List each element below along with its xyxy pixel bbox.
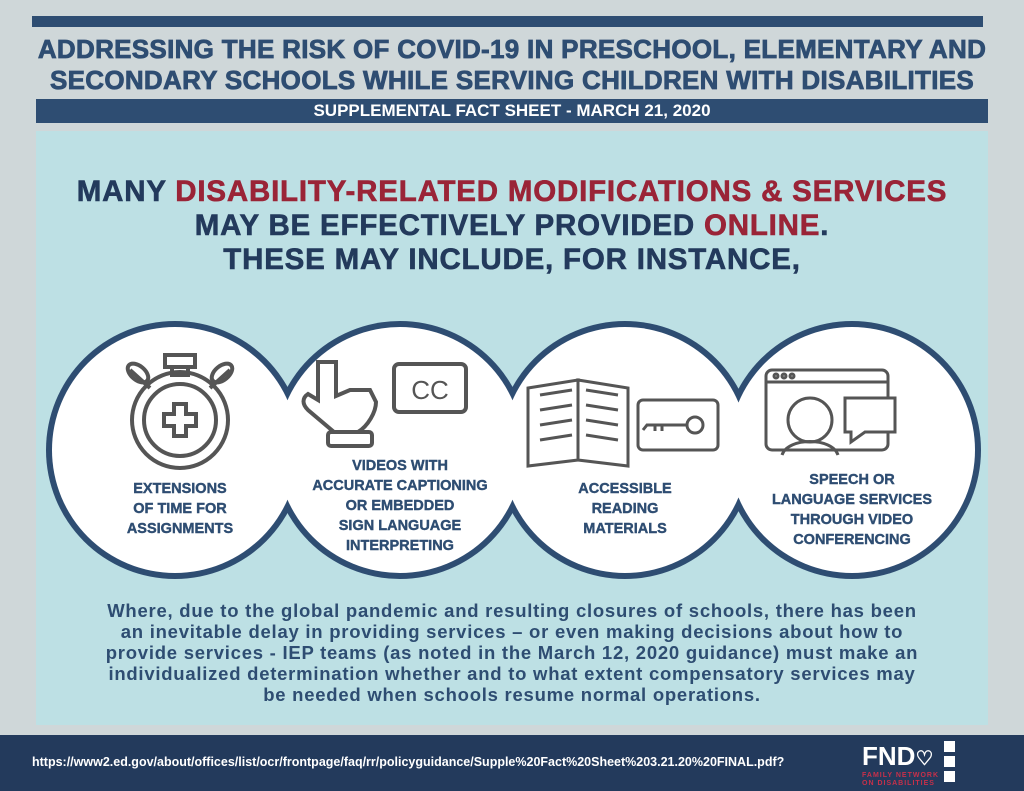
paragraph: individualized determination whether and to what extent compensatory services may <box>108 663 916 684</box>
subtitle bar: SUPPLEMENTAL FACT SHEET - MARCH 21, 2020 <box>313 101 711 120</box>
logo <box>862 741 939 787</box>
label: reading <box>578 481 672 537</box>
icon: sign hand and CC <box>304 362 466 446</box>
label: speech <box>772 472 932 548</box>
paragraph: provide services - IEP teams (as noted in the March 12, 2020 guidance) must make an <box>106 642 918 663</box>
logo: ON DISABILITIES <box>862 780 935 787</box>
label: extensions <box>127 481 233 537</box>
paragraph: an inevitable delay in providing services – or even making decisions about how to <box>121 621 903 642</box>
label: reading: READING <box>592 501 658 517</box>
label: videos: VIDEOS WITH <box>352 458 448 474</box>
label: videos: OR EMBEDDED <box>346 498 454 514</box>
logo: FAMILY NETWORK <box>862 772 939 779</box>
title: SECONDARY SCHOOLS WHILE SERVING CHILDREN WITH DISABILITIES <box>50 65 974 95</box>
paragraph <box>106 600 918 705</box>
label: videos <box>312 458 488 554</box>
footer url: https://www2.ed.gov/about/offices/list/ocr/frontpage/faq/rr/policyguidance/Supple%20Fact%20Sheet%203.21.20%20FINAL.pdf? <box>32 755 784 769</box>
top bar <box>32 16 983 27</box>
panel: main content <box>36 131 988 725</box>
paragraph: be needed when schools resume normal operations. <box>263 684 761 705</box>
icon: book and key <box>528 380 718 466</box>
label: speech: THROUGH VIDEO <box>791 512 913 528</box>
label: reading: ACCESSIBLE <box>578 481 672 497</box>
social icons <box>944 741 955 782</box>
title <box>38 34 986 95</box>
label: extensions: ASSIGNMENTS <box>127 521 233 537</box>
subtitle bar <box>36 99 988 123</box>
circles chart: CC <box>411 375 449 405</box>
label: speech: CONFERENCING <box>793 532 911 548</box>
logo: FND♡ <box>862 741 933 771</box>
title: ADDRESSING THE RISK OF COVID-19 IN PRESCHOOL, ELEMENTARY AND <box>38 34 986 64</box>
label: speech: SPEECH OR <box>809 472 895 488</box>
label: videos: INTERPRETING <box>346 538 454 554</box>
label: videos: SIGN LANGUAGE <box>339 518 461 534</box>
headline: THESE MAY INCLUDE, FOR INSTANCE, <box>223 243 801 276</box>
label: extensions: OF TIME FOR <box>133 501 227 517</box>
headline: MAY BE EFFECTIVELY PROVIDED ONLINE. <box>195 209 829 242</box>
icon: video conference <box>766 370 895 455</box>
icon: stopwatch <box>124 355 236 468</box>
label: reading: MATERIALS <box>583 521 667 537</box>
label: extensions: EXTENSIONS <box>133 481 227 497</box>
footer <box>0 735 1024 791</box>
paragraph: Where, due to the global pandemic and resulting closures of schools, there has been <box>107 600 917 621</box>
label: videos: ACCURATE CAPTIONING <box>312 478 488 494</box>
headline: MANY DISABILITY-RELATED MODIFICATIONS & SERVICES <box>77 175 947 208</box>
label: speech: LANGUAGE SERVICES <box>772 492 932 508</box>
headline <box>77 175 947 276</box>
